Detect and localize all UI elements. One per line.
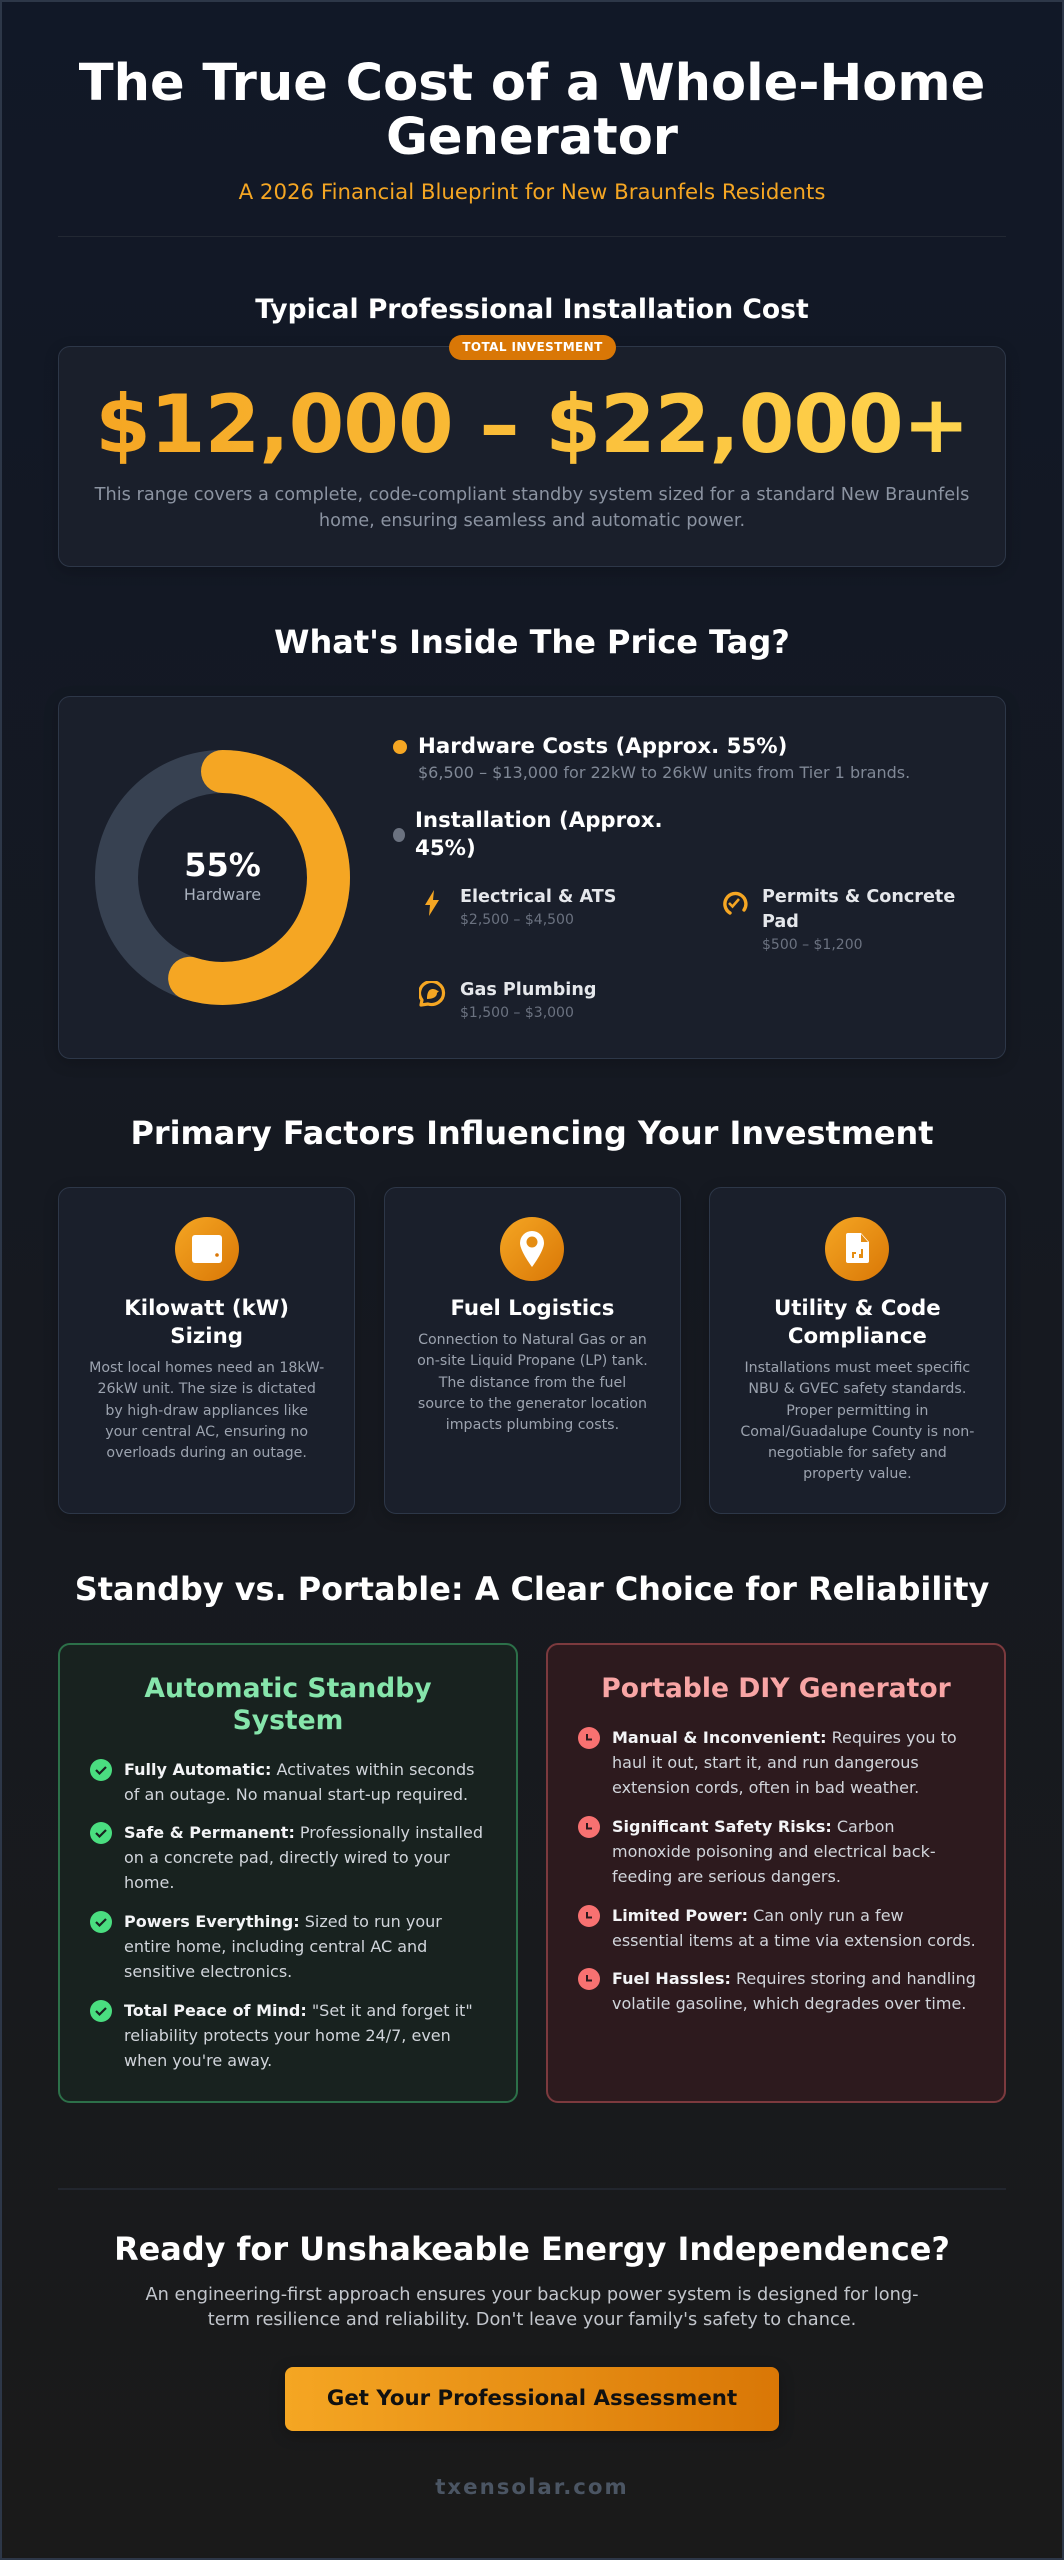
- badge: total investment: [449, 335, 616, 360]
- heading: standby vs portable: Standby vs. Portable: A Clear Choice for Reliability: [75, 1570, 989, 1608]
- item: powers everything: [124, 1912, 442, 1981]
- card text: Most local homes need an 18kW-: [89, 1360, 324, 1376]
- price description: This range covers a complete, code-compliant standby system sized for a standard New Braunfels: [95, 485, 969, 505]
- item: safe and permanent: home.: [124, 1873, 174, 1892]
- card title: Compliance: [788, 1324, 927, 1349]
- panel: portable diy: [546, 1643, 1006, 2103]
- card text: impacts plumbing costs.: [446, 1417, 619, 1433]
- item: safety risks: monoxide poisoning and electrical back-: [612, 1842, 936, 1861]
- standby title: System: [233, 1705, 343, 1736]
- card text: The distance from the fuel: [439, 1375, 626, 1391]
- card text: Installations must meet specific: [744, 1360, 970, 1376]
- heading: call to action: Ready for Unshakeable Energy Independence?: [114, 2230, 950, 2268]
- item: fully automatic: Fully Automatic: Activates within seconds: [124, 1760, 474, 1779]
- title: Generator: [386, 108, 678, 167]
- permits cost: $500 – $1,200: [762, 937, 863, 953]
- item: fully automatic: of an outage. No manual start-up required.: [124, 1785, 468, 1804]
- item: safety risks: Significant Safety Risks: Carbon: [612, 1817, 894, 1836]
- donut label: Hardware: [184, 885, 261, 904]
- card title: Sizing: [170, 1324, 243, 1349]
- icon: check: [90, 1822, 112, 1844]
- icon: check: [90, 1911, 112, 1933]
- icon: check: [90, 1759, 112, 1781]
- heading: primary factors: Primary Factors Influencing Your Investment: [130, 1114, 934, 1152]
- card text: source to the generator location: [418, 1396, 647, 1412]
- heading: installation cost: Typical Professional Installation Cost: [255, 294, 809, 325]
- hardware title: Hardware Costs (Approx. 55%): [418, 734, 787, 759]
- panel: kilowatt sizing: [58, 1187, 355, 1514]
- title: [79, 54, 985, 167]
- price range: $12,000 – $22,000+: [95, 378, 969, 471]
- item: permits: [723, 887, 955, 953]
- electrical cost: $2,500 – $4,500: [460, 912, 574, 928]
- icon: panel box: [175, 1217, 239, 1281]
- gas cost: $1,500 – $3,000: [460, 1005, 574, 1021]
- legend: hardware: [393, 734, 910, 782]
- panel: automatic standby: [58, 1643, 518, 2103]
- item: powers everything: entire home, including central AC and: [124, 1937, 427, 1956]
- card title: [124, 1296, 289, 1349]
- panel: fuel logistics: [384, 1187, 681, 1514]
- item: powers everything: Powers Everything: Sized to run your: [124, 1912, 442, 1931]
- item: limited power: Limited Power: Can only run a few: [612, 1906, 904, 1925]
- legend: installation: [393, 808, 663, 861]
- portable title: Portable DIY Generator: [601, 1673, 951, 1704]
- gas title: Gas Plumbing: [460, 980, 596, 1000]
- card title: Utility & Code: [774, 1296, 941, 1321]
- footer domain: txensolar.com: [435, 2475, 629, 2500]
- item: manual: [612, 1728, 957, 1797]
- icon: warning mark: [578, 1816, 600, 1838]
- standby title: Automatic Standby: [144, 1673, 432, 1704]
- item: manual: haul it out, start it, and run dangerous: [612, 1753, 919, 1772]
- icon: warning mark: [578, 1905, 600, 1927]
- icon: map pin: [500, 1217, 564, 1281]
- call to action text: term resilience and reliability. Don't leave your family's safety to chance.: [208, 2310, 856, 2330]
- card text: by high-draw appliances like: [105, 1403, 308, 1419]
- card text: Connection to Natural Gas or an: [418, 1332, 647, 1348]
- card text: [740, 1360, 974, 1482]
- item: safe and permanent: [124, 1823, 483, 1892]
- card text: [89, 1360, 324, 1461]
- card title: Kilowatt (kW): [124, 1296, 289, 1321]
- card text: on-site Liquid Propane (LP) tank.: [417, 1353, 648, 1369]
- price description: home, ensuring seamless and automatic power.: [319, 511, 745, 531]
- donut value: 55%: [184, 846, 261, 884]
- card text: negotiable for safety and: [768, 1445, 947, 1461]
- installation title: 45%): [415, 836, 476, 861]
- item: gas: [419, 980, 596, 1021]
- button: assessment: [285, 2367, 779, 2431]
- call to action text: An engineering-first approach ensures your backup power system is designed for long-: [145, 2285, 919, 2305]
- item: peace of mind: [124, 2001, 473, 2070]
- card text: your central AC, ensuring no: [105, 1424, 308, 1440]
- icon: document: [825, 1217, 889, 1281]
- permits title: Pad: [762, 912, 799, 932]
- badge: total investment: TOTAL INVESTMENT: [462, 340, 603, 354]
- title: The True Cost of a Whole-Home: [79, 54, 985, 113]
- panel: price breakdown: [58, 696, 1006, 1059]
- card text: [417, 1332, 648, 1433]
- item: fully automatic: [124, 1760, 474, 1804]
- item: limited power: essential items at a time via extension cords.: [612, 1931, 976, 1950]
- card text: 26kW unit. The size is dictated: [97, 1381, 316, 1397]
- electrical title: Electrical & ATS: [460, 887, 616, 907]
- item: limited power: [612, 1906, 976, 1950]
- hardware detail: $6,500 – $13,000 for 22kW to 26kW units from Tier 1 brands.: [418, 763, 910, 782]
- permits title: Permits & Concrete: [762, 887, 955, 907]
- card text: NBU & GVEC safety standards.: [748, 1381, 966, 1397]
- item: fuel hassles: [612, 1969, 976, 2013]
- item: peace of mind: reliability protects your home 24/7, even: [124, 2026, 451, 2045]
- card text: overloads during an outage.: [106, 1445, 307, 1461]
- icon: gas bubble: [419, 981, 446, 1007]
- donut chart: [95, 750, 350, 1005]
- icon: check: [90, 2000, 112, 2022]
- panel: utility compliance: [709, 1187, 1006, 1514]
- item: peace of mind: Total Peace of Mind: "Set it and forget it": [124, 2001, 473, 2020]
- item: manual: Manual & Inconvenient: Requires you to: [612, 1728, 957, 1747]
- icon: bolt: [425, 890, 439, 916]
- icon: gauge: [723, 892, 748, 915]
- item: manual: extension cords, often in bad weather.: [612, 1778, 919, 1797]
- icon: warning mark: [578, 1727, 600, 1749]
- icon: warning mark: [578, 1968, 600, 1990]
- call to action text: [145, 2285, 919, 2330]
- item: fuel hassles: volatile gasoline, which degrades over time.: [612, 1994, 966, 2013]
- card title: [774, 1296, 941, 1349]
- item: peace of mind: when you're away.: [124, 2051, 272, 2070]
- subtitle: A 2026 Financial Blueprint for New Braunfels Residents: [239, 180, 825, 205]
- heading: price tag: What's Inside The Price Tag?: [274, 623, 790, 661]
- button: assessment: Get Your Professional Assessment: [327, 2386, 737, 2411]
- card text: property value.: [803, 1466, 912, 1482]
- item: safety risks: feeding are serious dangers.: [612, 1867, 841, 1886]
- item: safety risks: [612, 1817, 936, 1886]
- permits title: [762, 887, 955, 932]
- item: safe and permanent: Safe & Permanent: Professionally installed: [124, 1823, 483, 1842]
- card text: Proper permitting in: [786, 1403, 928, 1419]
- item: electrical: [425, 887, 616, 928]
- card title: Fuel Logistics: [450, 1296, 614, 1321]
- price description: [94, 485, 969, 531]
- item: safe and permanent: on a concrete pad, directly wired to your: [124, 1848, 450, 1867]
- panel: total investment: [58, 346, 1006, 567]
- installation title: Installation (Approx.: [415, 808, 663, 833]
- item: powers everything: sensitive electronics.: [124, 1962, 292, 1981]
- standby title: [144, 1673, 432, 1736]
- card text: Comal/Guadalupe County is non-: [740, 1424, 974, 1440]
- installation title: [415, 808, 663, 861]
- item: fuel hassles: Fuel Hassles: Requires storing and handling: [612, 1969, 976, 1988]
